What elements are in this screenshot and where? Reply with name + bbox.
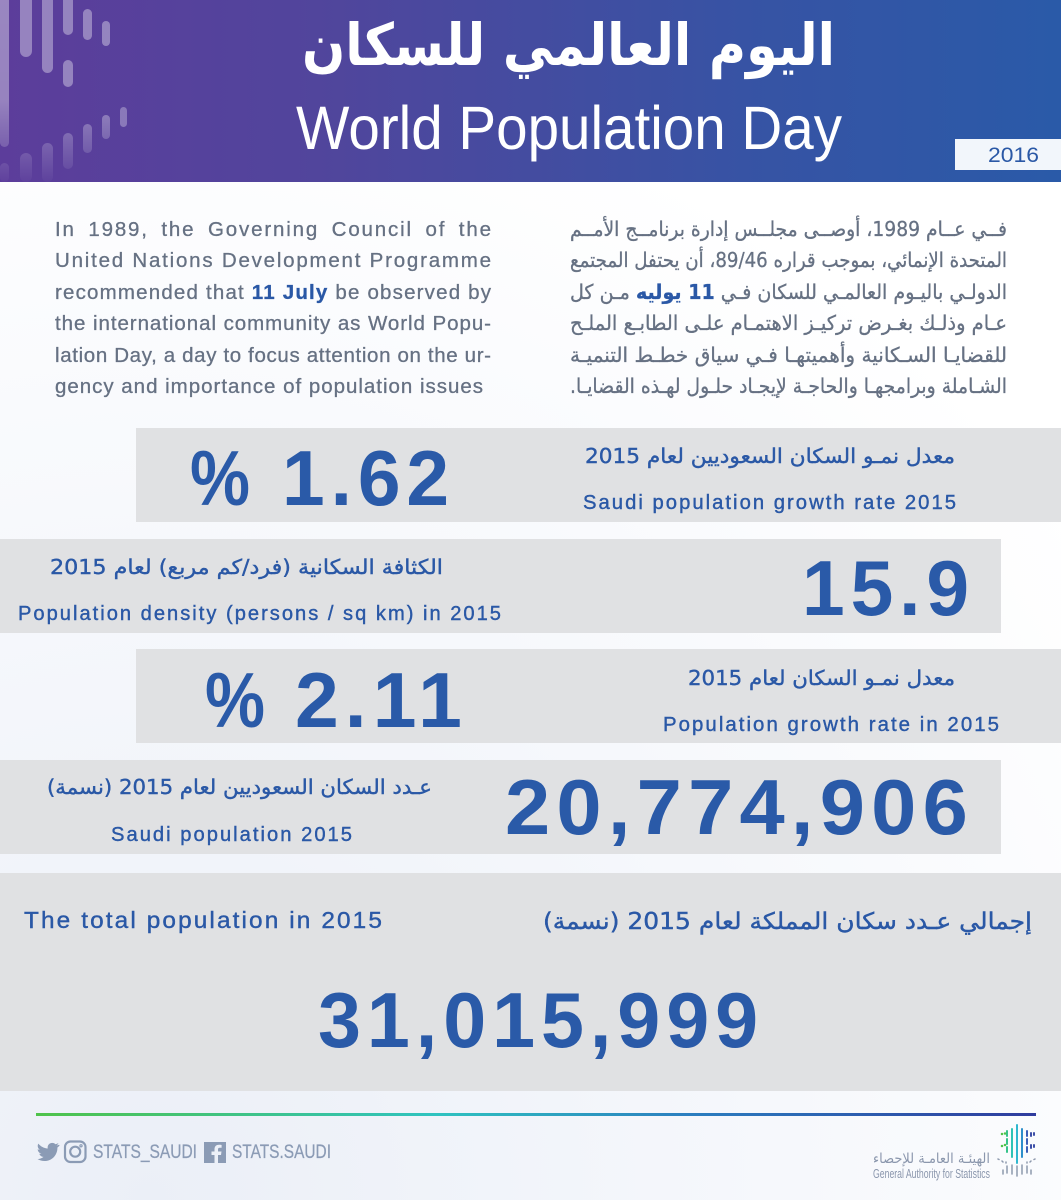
social links — [38, 1142, 331, 1163]
stat: total population — [0, 873, 1061, 1091]
english paragraph — [55, 218, 492, 398]
arabic paragraph — [570, 216, 1007, 398]
stat: population growth rate: 2.11 — [295, 656, 468, 744]
english paragraph: the international community as World Popu- — [55, 312, 491, 335]
logo: general authority for statistics — [873, 1125, 1035, 1181]
stat: saudi population — [0, 760, 1001, 854]
arabic paragraph: فــي عــام 1989، أوصــى مجلــس إدارة برنامــج الأمــم — [570, 216, 1007, 242]
stat: saudi growth rate: معدل نمـو السكان السعوديين لعام 2015 — [585, 444, 955, 468]
logo mark — [998, 1125, 1035, 1176]
english paragraph: recommended that 11 July be observed by — [55, 281, 492, 304]
english paragraph: gency and importance of population issues — [55, 375, 483, 398]
title english: World Population Day — [296, 94, 842, 162]
english paragraph: lation Day, a day to focus attention on the ur- — [55, 344, 491, 367]
header banner — [0, 0, 1061, 182]
arabic paragraph: عـام وذلـك بغـرض تركيـز الاهتمـام علـى الطابـع الملـح — [570, 311, 1007, 335]
decorative stripes — [0, 0, 127, 182]
stat: total population: The total population in 2015 — [24, 907, 384, 933]
arabic paragraph: الدولـي باليـوم العالمـي للسكان فـي 11 يوليه مـن كل — [570, 280, 1007, 304]
footer gradient rule — [36, 1113, 1036, 1116]
stat: population growth rate: معدل نمـو السكان لعام 2015 — [688, 666, 955, 690]
arabic paragraph: المتحدة الإنمائي، بموجب قراره 89/46، أن يحتفل المجتمع — [570, 247, 1007, 272]
stat: saudi population: عـدد السكان السعوديين لعام 2015 (نسمة) — [47, 775, 432, 799]
year tag: 2016 — [988, 144, 1039, 167]
stat: population density — [0, 539, 1001, 633]
stat: population growth rate: % — [205, 656, 265, 744]
stat: population growth rate — [136, 649, 1061, 744]
logo name english: General Authority for Statistics — [873, 1167, 990, 1181]
icon: instagram — [65, 1142, 86, 1162]
stat: saudi population: Saudi population 2015 — [111, 824, 354, 846]
handle: twitter and instagram: STATS_SAUDI — [93, 1142, 197, 1163]
stat: saudi growth rate: Saudi population growth rate 2015 — [583, 492, 958, 514]
icon: twitter — [38, 1143, 60, 1161]
stat: saudi growth rate: 1.62 — [282, 434, 455, 522]
handle: facebook: STATS.SAUDI — [232, 1142, 331, 1163]
english paragraph: United Nations Development Programme — [55, 249, 491, 272]
year tag — [955, 139, 1061, 170]
arabic paragraph: للقضايـا السـكانية وأهميتهـا فـي سياق خطـط التنميـة — [570, 342, 1007, 367]
stat: population density: 15.9 — [802, 544, 975, 632]
stat: saudi growth rate: % — [190, 434, 250, 522]
stat: total population: 31,015,999 — [318, 976, 764, 1064]
stat: saudi growth rate — [136, 428, 1061, 522]
stat: total population: إجمالي عـدد سكان المملكة لعام 2015 (نسمة) — [543, 909, 1032, 935]
stat: population density: الكثافة السكانية (فرد/كم مربع) لعام 2015 — [50, 555, 443, 579]
arabic paragraph: الشـاملة وبرامجهـا والحاجـة لإيجـاد حلـول لهـذه القضايـا. — [570, 374, 1007, 398]
logo name arabic: الهيئـة العامـة للإحصاء — [873, 1151, 990, 1167]
stat: saudi population: 20,774,906 — [505, 763, 974, 851]
stat: population growth rate: Population growth rate in 2015 — [663, 714, 1001, 736]
icon: facebook — [204, 1142, 226, 1163]
title arabic: اليوم العالمي للسكان — [302, 11, 835, 80]
stat: population density: Population density (persons / sq km) in 2015 — [18, 603, 503, 625]
english paragraph: In 1989, the Governing Council of the — [55, 218, 491, 241]
